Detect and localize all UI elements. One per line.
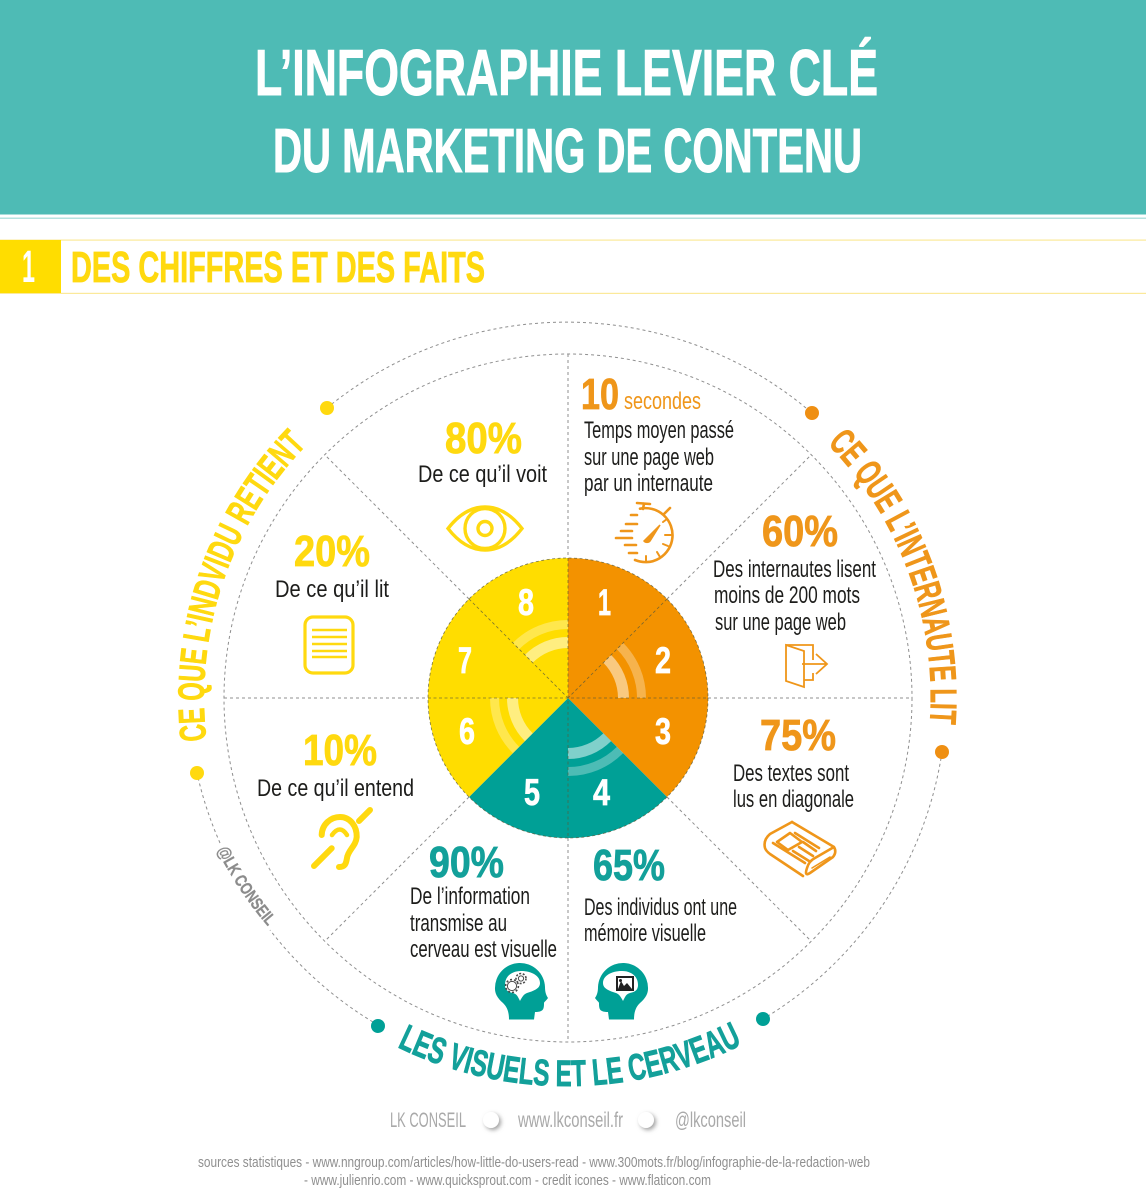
contact separator ball	[638, 1112, 654, 1128]
fact 4: 65%	[584, 841, 737, 1020]
fact 1: 10 secondes	[581, 370, 734, 562]
fact 1: 10 secondes: 10	[581, 370, 619, 419]
icon: stopwatch	[616, 503, 673, 562]
fact 6: 10%	[257, 726, 414, 867]
fact 4: 65%: Des individus ont une	[584, 894, 737, 921]
fact 4: 65%: 65%	[593, 841, 665, 890]
fact 3: 75%	[733, 711, 854, 876]
fact 2: 60%: Des internautes lisent	[713, 556, 876, 583]
footer contacts: @lkconseil	[675, 1109, 746, 1132]
fact 8: 80%	[418, 414, 547, 550]
outer ring labels	[178, 401, 957, 1086]
ring label: orange: CE QUE L’INTERNAUTE LIT	[831, 430, 957, 725]
fact 2: 60%: sur une page web	[715, 609, 846, 636]
pie numbers: 5	[524, 772, 540, 813]
icon: eye	[448, 507, 522, 550]
pie numbers: 6	[459, 711, 475, 752]
signal arcs	[494, 624, 642, 772]
pie numbers: 8	[518, 582, 534, 623]
footer contacts: www.lkconseil.fr	[517, 1109, 623, 1132]
ring label: yellow: CE QUE L’INDVIDU RETIENT	[178, 427, 304, 741]
pie sector: teal	[469, 698, 667, 838]
fact 2: 60%	[713, 507, 876, 687]
wheel guides	[197, 322, 942, 1042]
section heading	[0, 240, 1146, 294]
footer contacts	[390, 1109, 746, 1132]
sources	[198, 1155, 870, 1189]
pie numbers	[458, 582, 671, 813]
pie numbers: 1	[598, 582, 611, 623]
fact 6: 10%: 10%	[303, 726, 377, 775]
watermark: @LK CONSEIL	[216, 848, 274, 926]
section number: 1	[22, 241, 35, 292]
centre pie	[428, 558, 708, 838]
pie sector: yellow	[428, 558, 568, 797]
fact 5: 90%: 90%	[429, 838, 504, 887]
fact 3: 75%: lus en diagonale	[733, 786, 854, 813]
icon: document	[305, 617, 353, 673]
section title: DES CHIFFRES ET DES FAITS	[71, 243, 485, 292]
icon: newspaper	[765, 822, 835, 876]
fact 7: 20%: 20%	[294, 527, 370, 576]
fact 1: 10 secondes: par un internaute	[584, 470, 713, 497]
fact 5: 90%	[410, 838, 557, 1020]
fact 1: 10 secondes: sur une page web	[584, 444, 714, 471]
fact 5: 90%: cerveau est visuelle	[410, 936, 557, 963]
ring label: teal: LES VISUELS ET LE CERVEAU	[398, 1022, 739, 1086]
pie sector: orange	[568, 558, 708, 797]
fact 5: 90%: De l’information	[410, 883, 530, 910]
fact 8: 80%: 80%	[445, 414, 522, 463]
pie numbers: 2	[655, 640, 671, 681]
fact 3: 75%: Des textes sont	[733, 760, 849, 787]
contact separator ball	[483, 1112, 499, 1128]
fact 7: 20%	[275, 527, 389, 673]
icon: hearing	[314, 810, 370, 867]
fact 2: 60%: 60%	[762, 507, 838, 556]
sources: sources statistiques - www.nngroup.com/articles/how-little-do-users-read - www.300mots.fr/blog/infographie-de-la-redaction-web	[198, 1155, 870, 1171]
title line 1: L’INFOGRAPHIE LEVIER CLÉ	[255, 36, 878, 109]
sources: - www.julienrio.com - www.quicksprout.com - credit icones - www.flaticon.com	[304, 1173, 711, 1189]
fact 4: 65%: mémoire visuelle	[584, 920, 706, 947]
fact 1: 10 secondes: secondes	[624, 388, 701, 415]
fact 2: 60%: moins de 200 mots	[714, 582, 860, 609]
fact 1: 10 secondes: Temps moyen passé	[584, 417, 734, 444]
icon: head with image	[595, 963, 648, 1020]
icon: head with gears	[495, 963, 548, 1020]
pie numbers: 3	[655, 711, 671, 752]
fact 3: 75%: 75%	[760, 711, 836, 760]
fact 6: 10%: De ce qu’il entend	[257, 775, 414, 802]
ring dots	[190, 401, 949, 1033]
fact 8: 80%: De ce qu’il voit	[418, 461, 547, 488]
fact 5: 90%: transmise au	[410, 910, 507, 937]
icon: exit door	[786, 645, 827, 687]
pie numbers: 4	[593, 772, 610, 813]
header band	[0, 0, 1146, 219]
fact 7: 20%: De ce qu’il lit	[275, 576, 389, 603]
footer contacts: LK CONSEIL	[390, 1109, 466, 1132]
pie numbers: 7	[458, 640, 472, 681]
